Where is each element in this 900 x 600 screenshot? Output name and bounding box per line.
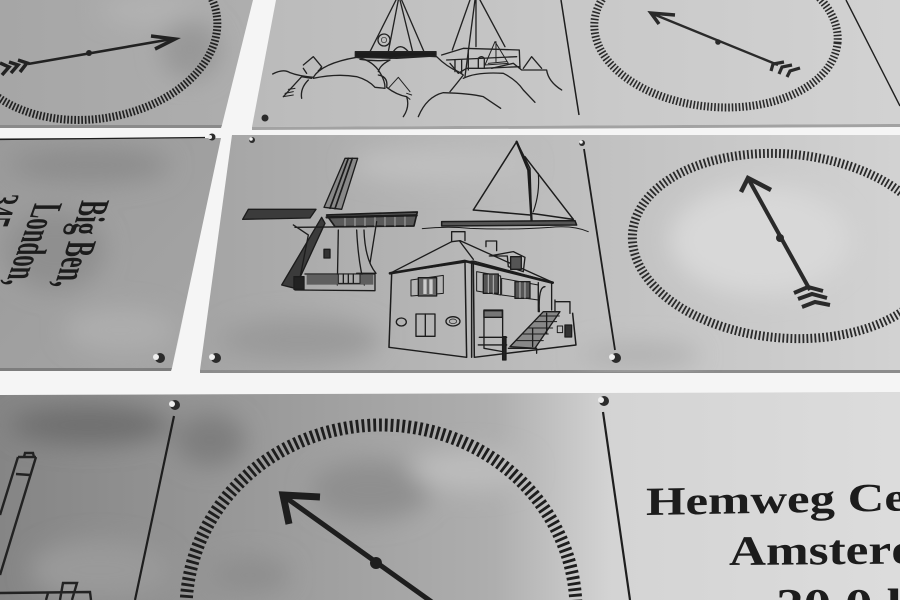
mounting screws [153,114,621,410]
text: Big Ben, London: Big Ben, [44,200,118,287]
illustration: windmill [243,158,417,291]
illustration: house with staircase [389,232,576,360]
illustration: castle towers on hills [273,0,562,117]
compass: bottom [186,425,576,600]
windmill body [293,222,377,291]
illustration: sailboat [422,142,588,232]
compass: middle [625,141,900,351]
plate: bottom row [0,392,900,600]
plate: middle left [0,138,221,371]
text: Hemweg Centrale, Amsterdam [646,472,900,600]
plate: top left [0,0,253,128]
plate: middle centre [200,135,900,373]
windmill lower sail [282,217,325,288]
compass: top left [0,0,222,124]
plate: top centre and right [252,0,900,130]
windmill right sail [327,212,417,227]
windmill upper sail [324,158,358,209]
windmill left sail [243,209,316,219]
compass: top right [588,0,844,117]
text: Big Ben, London [0,194,118,287]
factory chimney fragment [0,453,91,600]
